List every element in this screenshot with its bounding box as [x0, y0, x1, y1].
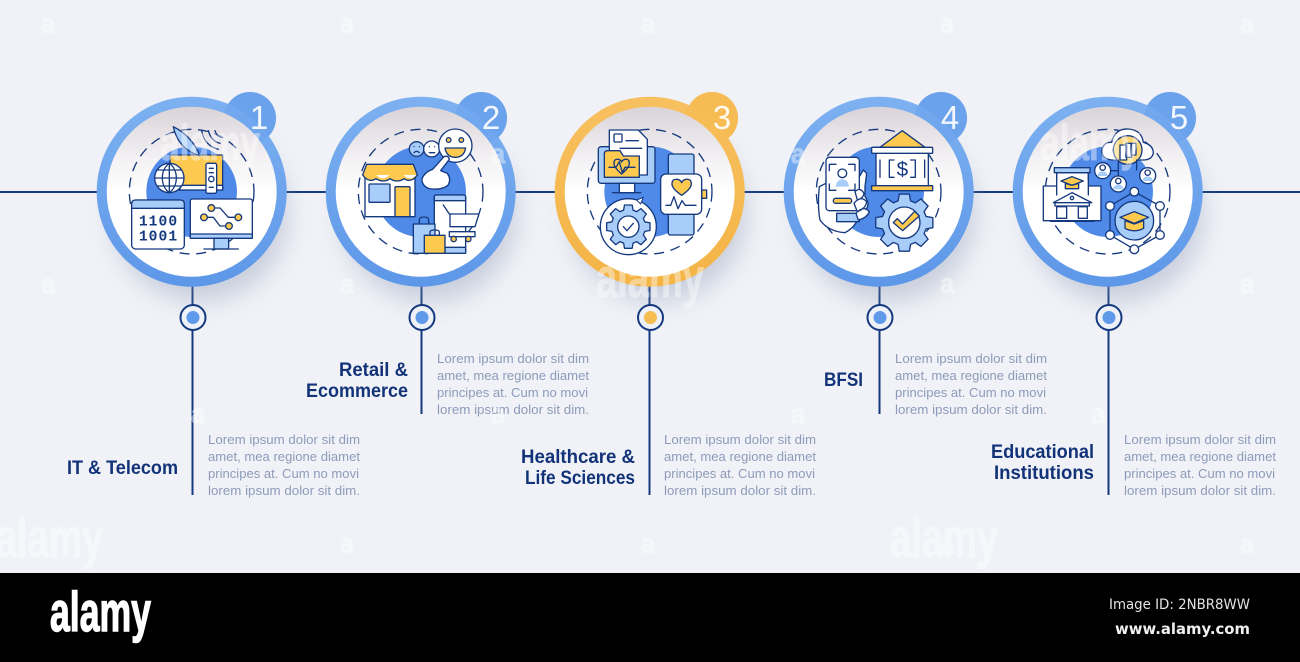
heading: IT & Telecom: IT & Telecom [67, 458, 178, 479]
text block 1: principes at. Cum no movi [208, 466, 359, 481]
heading: Retail & Ecommerce [306, 360, 408, 402]
watermarks: a [191, 398, 205, 429]
website: www.alamy.com [1115, 620, 1250, 638]
text block 3: principes at. Cum no movi [664, 466, 815, 481]
text block 5: amet, mea regione diamet [1124, 449, 1276, 464]
text block 2 [437, 351, 589, 417]
text block 4: Lorem ipsum dolor sit dim [895, 351, 1047, 366]
text block 5: lorem ipsum dolor sit dim. [1124, 483, 1276, 498]
connector node 5 [1096, 305, 1122, 330]
watermarks: alamy [0, 506, 103, 569]
heading: Healthcare & Life Sciences: Life Sciences [525, 468, 635, 489]
watermarks: a [940, 268, 954, 299]
panel: Educational Institutions [991, 92, 1276, 498]
watermarks: alamy [1040, 115, 1140, 171]
watermarks: a [1240, 268, 1254, 299]
icon: telecom and computing [129, 127, 254, 254]
text block 2: lorem ipsum dolor sit dim. [437, 402, 589, 417]
watermarks: a [491, 138, 505, 169]
watermarks: a [340, 8, 354, 39]
text block 1: amet, mea regione diamet [208, 449, 360, 464]
heading: BFSI: BFSI [824, 370, 863, 391]
number badge 2: 2 [482, 99, 500, 136]
connector node 1 [180, 305, 206, 330]
panel: Healthcare & Life Sciences [521, 92, 816, 498]
watermarks: a [41, 268, 55, 299]
text block 2: Lorem ipsum dolor sit dim [437, 351, 589, 366]
watermarks: a [340, 528, 354, 559]
heading: Retail & Ecommerce: Ecommerce [306, 381, 408, 402]
watermarks: a [791, 398, 805, 429]
watermarks: a [41, 8, 55, 39]
watermarks: alamy [596, 246, 704, 309]
text block 2: principes at. Cum no movi [437, 385, 588, 400]
watermarks: a [1091, 398, 1105, 429]
watermarks: a [940, 8, 954, 39]
footer bar [0, 573, 1300, 662]
panel: IT & Telecom [67, 92, 360, 498]
watermarks: alamy [160, 115, 260, 171]
heading: Educational Institutions: Institutions [994, 463, 1094, 484]
text block 1 [208, 432, 360, 498]
watermarks: a [791, 138, 805, 169]
connector node 3 [638, 305, 663, 330]
heading: Retail & Ecommerce: Retail & [339, 360, 408, 381]
text block 4: lorem ipsum dolor sit dim. [895, 402, 1047, 417]
watermarks: a [491, 398, 505, 429]
watermarks: a [1240, 528, 1254, 559]
text block 3: amet, mea regione diamet [664, 449, 816, 464]
icon: healthcare devices [587, 129, 712, 255]
text block 4: amet, mea regione diamet [895, 368, 1047, 383]
number badge 1: 1 [250, 99, 268, 136]
watermarks: a [641, 528, 655, 559]
watermarks: a [641, 8, 655, 39]
icon: education network [1043, 129, 1170, 254]
connector node 2 [410, 305, 434, 330]
horizontal timeline line [0, 191, 1300, 193]
dollar sign: $ [897, 158, 909, 181]
icon: retail and shopping [358, 129, 483, 254]
text block 5 [1124, 432, 1276, 498]
heading: Educational Institutions: Educational [991, 442, 1094, 463]
text block 1: lorem ipsum dolor sit dim. [208, 483, 360, 498]
number badge 3: 3 [713, 99, 731, 136]
text block 3 [664, 432, 816, 498]
watermarks: alamy [890, 506, 998, 569]
panel: Retail & Ecommerce [306, 92, 589, 417]
binary digits: 1100 [139, 215, 177, 231]
icon: banking and verification [816, 129, 941, 254]
heading: Healthcare & Life Sciences [521, 447, 635, 489]
heading: Educational Institutions [991, 442, 1094, 484]
connector node 4 [868, 305, 892, 330]
panel: BFSI [784, 92, 1047, 417]
text block 1: Lorem ipsum dolor sit dim [208, 432, 360, 447]
text block 5: principes at. Cum no movi [1124, 466, 1275, 481]
footer logo: alamy [50, 580, 151, 643]
watermarks: a [940, 528, 954, 559]
number badge 4: 4 [941, 99, 959, 136]
text block 5: Lorem ipsum dolor sit dim [1124, 432, 1276, 447]
text block 3: lorem ipsum dolor sit dim. [664, 483, 816, 498]
number badge 5: 5 [1170, 99, 1188, 136]
text block 4: principes at. Cum no movi [895, 385, 1046, 400]
text block 2: amet, mea regione diamet [437, 368, 589, 383]
watermarks: a [1240, 8, 1254, 39]
watermarks: a [340, 268, 354, 299]
text block 4 [895, 351, 1047, 417]
binary digits [139, 215, 177, 245]
heading: Healthcare & Life Sciences: Healthcare & [521, 447, 635, 468]
image id: Image ID: 2NBR8WW [1109, 597, 1250, 613]
binary digits: 1001 [139, 229, 177, 245]
text block 3: Lorem ipsum dolor sit dim [664, 432, 816, 447]
